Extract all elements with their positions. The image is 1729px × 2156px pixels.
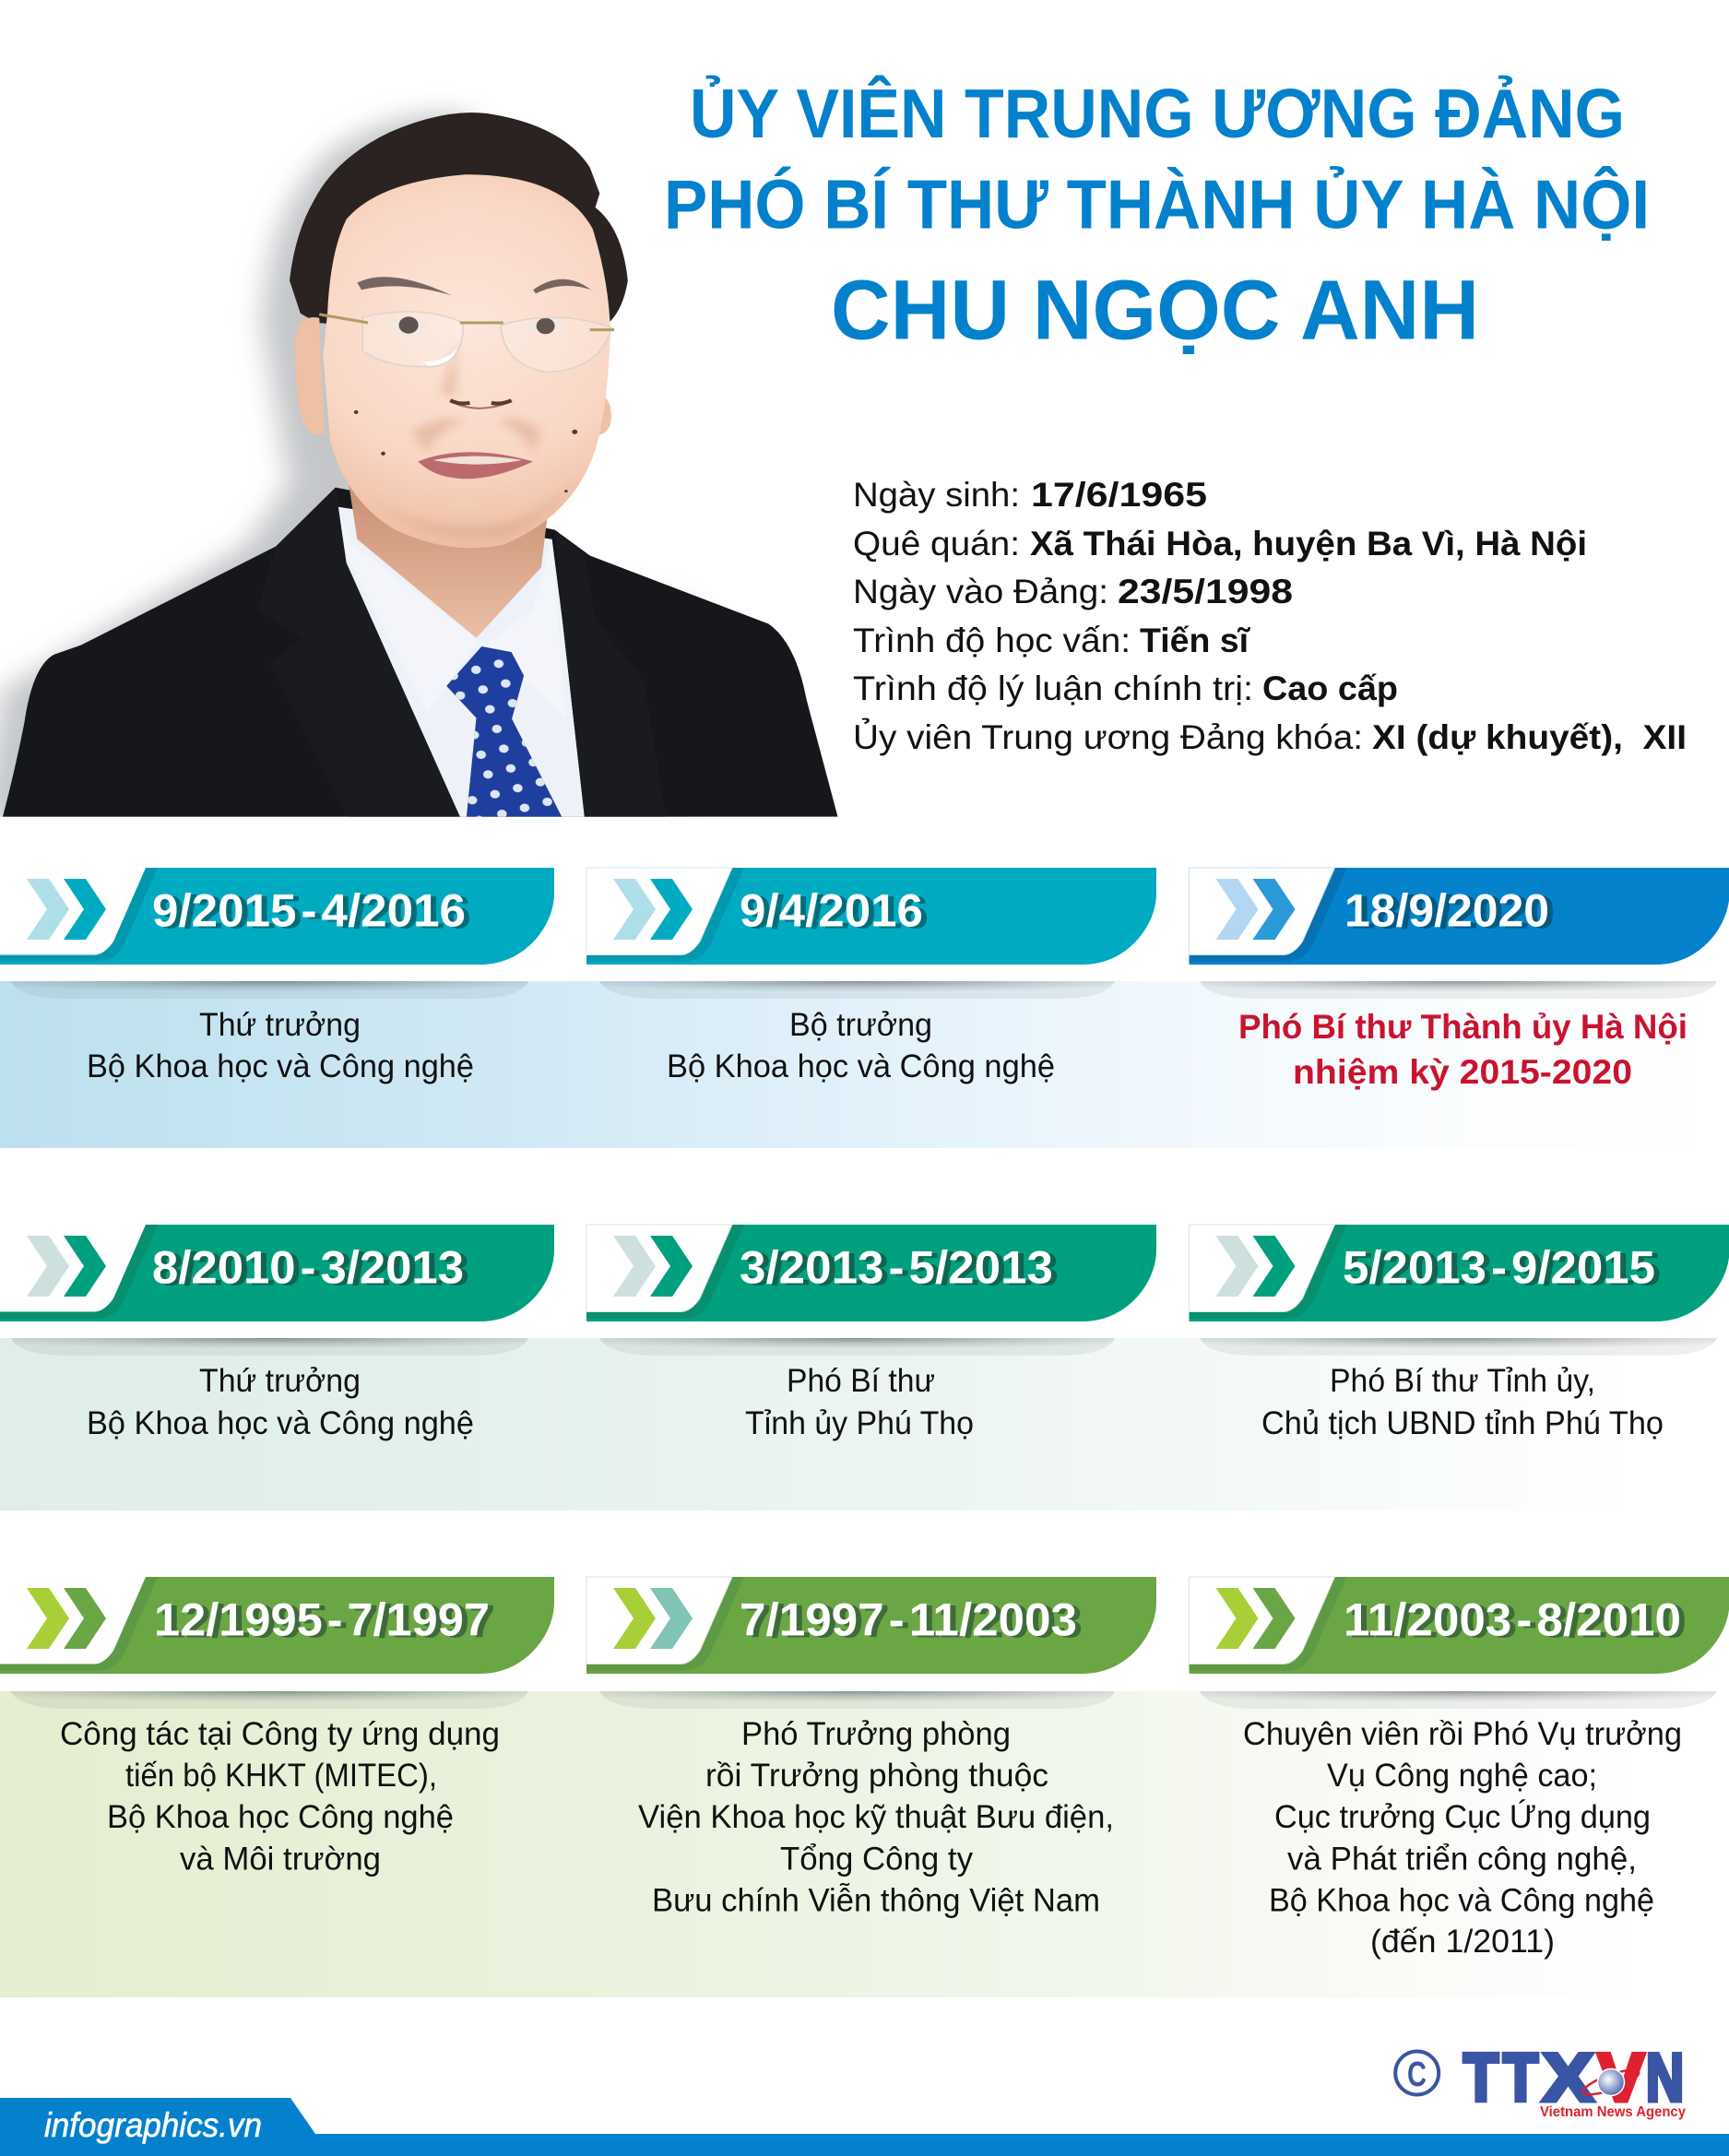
date banner: 9/2015 - 4/2016 [0, 868, 554, 965]
title [664, 75, 1650, 358]
biography details: Quê quán: [853, 524, 1020, 563]
panel: row 2 background [0, 1338, 1729, 1510]
date banner: 12/1995 - 7/1997: 12/1995 - 7/1997 [160, 1595, 495, 1647]
soft shadow behind portrait [0, 113, 690, 823]
text: row 2 column 2: Tỉnh ủy Phú Thọ [745, 1405, 974, 1441]
ears [295, 317, 325, 434]
date banner: 5/2013 - 9/2015 [1190, 1225, 1729, 1321]
eyes [388, 318, 429, 334]
panel: row 1 background [0, 981, 1729, 1148]
text: row 3 column 2: Phó Trưởng phòng [741, 1716, 1011, 1752]
text: row 3 column 3: Cục trưởng Cục Ứng dụng [1274, 1799, 1651, 1835]
TTXVN logo: X [1543, 2041, 1593, 2115]
biography details: Trình độ học vấn: [853, 621, 1131, 659]
text: row 3 column 1: Bộ Khoa học Công nghệ [107, 1799, 454, 1835]
biography details: Ngày vào Đảng: [853, 572, 1108, 610]
hair [290, 113, 628, 327]
biography details: XI (dự khuyết), XII [1372, 717, 1687, 756]
text: row 1 column 3 highlighted [1238, 1008, 1688, 1091]
footer bar [0, 2098, 1729, 2156]
TTXVN logo: V [1598, 2041, 1644, 2115]
date banner: 9/4/2016 [586, 868, 1156, 965]
text: row 2 column 1: Bộ Khoa học và Công nghệ [87, 1405, 474, 1441]
text: row 1 column 1: Bộ Khoa học và Công nghệ [87, 1048, 474, 1084]
date banner: 3/2013 - 5/2013: 3/2013 - 5/2013 [745, 1243, 1059, 1295]
TTXVN logo: T [1503, 2041, 1538, 2115]
portrait photo [0, 113, 838, 823]
date banner: 7/1997 - 11/2003: 7/1997 - 11/2003 [745, 1595, 1083, 1647]
biography details: Trình độ lý luận chính trị: [853, 669, 1253, 707]
date banner: 7/1997 - 11/2003 [586, 1577, 1156, 1674]
date banner: 12/1995 - 7/1997: 12/1995 - 7/1997 [154, 1593, 490, 1645]
date banner: 11/2003 - 8/2010: 11/2003 - 8/2010 [1344, 1593, 1681, 1645]
text: row 1 column 1 [87, 1007, 474, 1084]
TTXVN logo: Vietnam News Agency [1540, 2104, 1686, 2120]
text: row 3 column 3: và Phát triển công nghệ, [1287, 1841, 1637, 1878]
date banner: 9/4/2016: 9/4/2016 [740, 885, 923, 937]
text: row 3 column 2: Viện Khoa học kỹ thuật Bưu điện, [638, 1799, 1114, 1835]
date banner: 8/2010 - 3/2013 [0, 1225, 554, 1321]
title: CHU NGỌC ANH [831, 264, 1479, 358]
text: row 2 column 3: Chủ tịch UBND tỉnh Phú Thọ [1261, 1405, 1664, 1441]
text: row 1 column 2: Bộ Khoa học và Công nghệ [667, 1048, 1055, 1084]
date banner: 8/2010 - 3/2013: 8/2010 - 3/2013 [158, 1243, 469, 1295]
text: row 3 column 3: (đến 1/2011) [1370, 1924, 1555, 1960]
date banner: 18/9/2020 [1190, 868, 1729, 965]
text: row 1 column 1: Thứ trưởng [199, 1007, 361, 1043]
copyright icon: C [1407, 2055, 1427, 2094]
lapels [257, 488, 460, 817]
tie [446, 646, 562, 817]
text: row 3 column 3: Bộ Khoa học và Công nghệ [1269, 1883, 1654, 1918]
TTXVN logo [1463, 2041, 1686, 2120]
text: row 2 column 1: Thứ trưởng [199, 1363, 361, 1399]
face shading [411, 350, 557, 539]
date banner: 9/4/2016: 9/4/2016 [745, 887, 929, 939]
text: row 3 column 2: rồi Trưởng phòng thuộc [705, 1758, 1048, 1794]
row 3 card shadows [11, 1691, 1717, 1709]
TTXVN logo: N [1646, 2041, 1684, 2115]
date banner: 11/2003 - 8/2010 [1190, 1577, 1729, 1674]
footer website label: infographics.vn [44, 2106, 262, 2144]
date banner: 5/2013 - 9/2015: 5/2013 - 9/2015 [1343, 1241, 1655, 1293]
row 2 card shadows [11, 1338, 1717, 1356]
panel: row 3 background [0, 1691, 1729, 1997]
suit jacket [3, 488, 838, 817]
neck [349, 485, 548, 638]
text: row 3 column 3: Vụ Công nghệ cao; [1327, 1758, 1597, 1794]
text: row 3 column 2: Tổng Công ty [780, 1841, 973, 1878]
nose [450, 400, 512, 409]
date banner: 7/1997 - 11/2003: 7/1997 - 11/2003 [740, 1593, 1077, 1645]
text: row 2 column 2: Phó Bí thư [787, 1363, 935, 1399]
date banner: 12/1995 - 7/1997 [0, 1577, 554, 1674]
text: row 1 column 2: Bộ trưởng [789, 1007, 932, 1043]
moles [354, 410, 577, 492]
TTXVN logo: T [1463, 2041, 1498, 2115]
date banner: 18/9/2020: 18/9/2020 [1350, 887, 1555, 939]
title: PHÓ BÍ THƯ THÀNH ỦY HÀ NỘI [664, 166, 1650, 243]
date banner: 3/2013 - 5/2013: 3/2013 - 5/2013 [740, 1241, 1053, 1293]
text: row 1 column 3 highlighted: nhiệm kỳ 2015-2020 [1293, 1053, 1632, 1091]
shirt [334, 506, 585, 817]
text: row 1 column 3 highlighted: Phó Bí thư Thành ủy Hà Nội [1238, 1008, 1688, 1046]
date banner: 5/2013 - 9/2015: 5/2013 - 9/2015 [1348, 1243, 1661, 1295]
biography details: Xã Thái Hòa, huyện Ba Vì, Hà Nội [1030, 524, 1587, 563]
text: row 3 column 1: tiến bộ KHKT (MITEC), [125, 1758, 437, 1794]
text: row 3 column 1: và Môi trường [180, 1841, 381, 1878]
date banner: 3/2013 - 5/2013 [586, 1225, 1156, 1321]
text: row 1 column 2 [667, 1007, 1055, 1084]
text: row 2 column 2 [745, 1363, 974, 1441]
text: row 2 column 1 [87, 1363, 474, 1441]
copyright icon [1395, 2051, 1439, 2095]
biography details: Ngày sinh: [853, 475, 1020, 514]
biography details: 17/6/1965 [1031, 475, 1207, 514]
biography details: Cao cấp [1262, 669, 1398, 707]
face [323, 174, 610, 548]
text: row 3 column 2: Bưu chính Viễn thông Việt Nam [652, 1883, 1100, 1918]
text: row 3 column 3 [1243, 1716, 1682, 1960]
date banner: 8/2010 - 3/2013: 8/2010 - 3/2013 [152, 1241, 464, 1293]
text: row 3 column 3: Chuyên viên rồi Phó Vụ trưởng [1243, 1716, 1682, 1752]
text: row 2 column 3: Phó Bí thư Tỉnh ủy, [1330, 1363, 1595, 1399]
biography details: Ủy viên Trung ương Đảng khóa: [853, 717, 1363, 756]
date banner: 18/9/2020: 18/9/2020 [1344, 885, 1549, 937]
title: ỦY VIÊN TRUNG ƯƠNG ĐẢNG [690, 75, 1625, 152]
text: row 2 column 3 [1261, 1363, 1664, 1441]
date banner: 9/2015 - 4/2016: 9/2015 - 4/2016 [158, 887, 471, 939]
biography details: 23/5/1998 [1118, 572, 1293, 610]
shirt collar [551, 539, 553, 545]
text: row 3 column 1 [60, 1716, 500, 1878]
text: row 3 column 2 [638, 1716, 1114, 1918]
biography details [853, 475, 1687, 756]
mouth [418, 452, 533, 479]
glasses [362, 312, 611, 373]
biography details: Tiến sĩ [1140, 621, 1251, 659]
row 1 card shadows [11, 981, 1717, 999]
text: row 3 column 1: Công tác tại Công ty ứng dụng [60, 1716, 500, 1752]
date banner: 11/2003 - 8/2010: 11/2003 - 8/2010 [1349, 1595, 1687, 1647]
globe [1581, 2066, 1641, 2099]
date banner: 9/2015 - 4/2016: 9/2015 - 4/2016 [152, 885, 466, 937]
eyebrows [357, 277, 452, 295]
